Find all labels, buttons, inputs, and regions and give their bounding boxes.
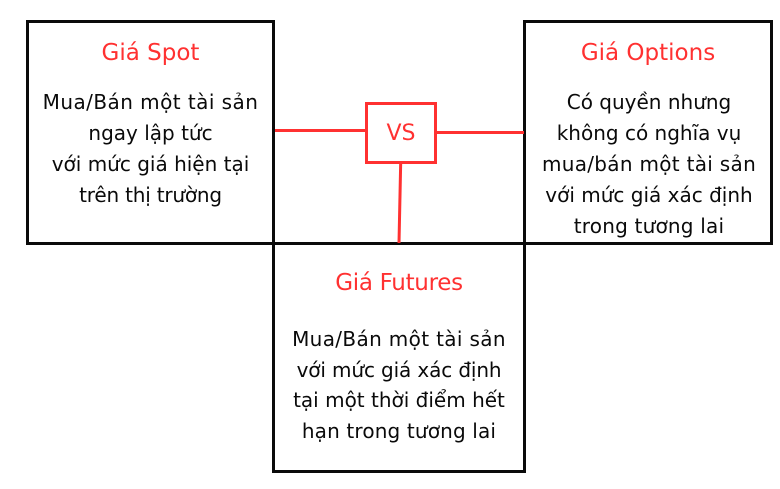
text: Giá Spot description — [43, 90, 258, 207]
panel: Giá Spot — [26, 20, 275, 245]
connector: VS to Options — [435, 131, 524, 134]
text: Giá Spot description: trên thị trường — [79, 183, 222, 207]
text: Giá Futures description: Mua/Bán một tài sản — [292, 327, 506, 351]
text: Giá Futures description: hạn trong tương lai — [302, 418, 496, 442]
panel: Giá Options — [523, 20, 773, 245]
connector: VS to Futures — [398, 164, 402, 243]
text: Giá Futures description — [292, 327, 506, 442]
text: Giá Spot description: Mua/Bán một tài sản — [43, 90, 258, 114]
text: Giá Options description: không có nghĩa vụ — [557, 121, 741, 145]
text: Giá Futures description: với mức giá xác định — [297, 358, 501, 382]
text: Giá Options description — [542, 90, 756, 238]
text: Giá Options description: với mức giá xác định — [545, 183, 753, 207]
text: Giá Options description: trong tương lai — [574, 214, 724, 238]
heading: Giá Spot: Giá Spot — [102, 40, 199, 66]
text: Giá Spot description: ngay lập tức — [88, 121, 213, 145]
heading: Giá Futures: Giá Futures — [335, 270, 463, 296]
heading: Giá Options: Giá Options — [581, 40, 715, 66]
text: Giá Spot description: với mức giá hiện tại — [52, 152, 249, 176]
connector: Spot to VS — [275, 129, 367, 132]
VS box — [365, 102, 437, 164]
text: Giá Options description: mua/bán một tài sản — [542, 152, 756, 176]
text: Giá Futures description: tại một thời điểm hết — [293, 388, 505, 412]
text: Giá Options description: Có quyền nhưng — [567, 90, 731, 114]
panel: Giá Futures — [272, 242, 526, 473]
VS box: VS — [386, 121, 416, 146]
